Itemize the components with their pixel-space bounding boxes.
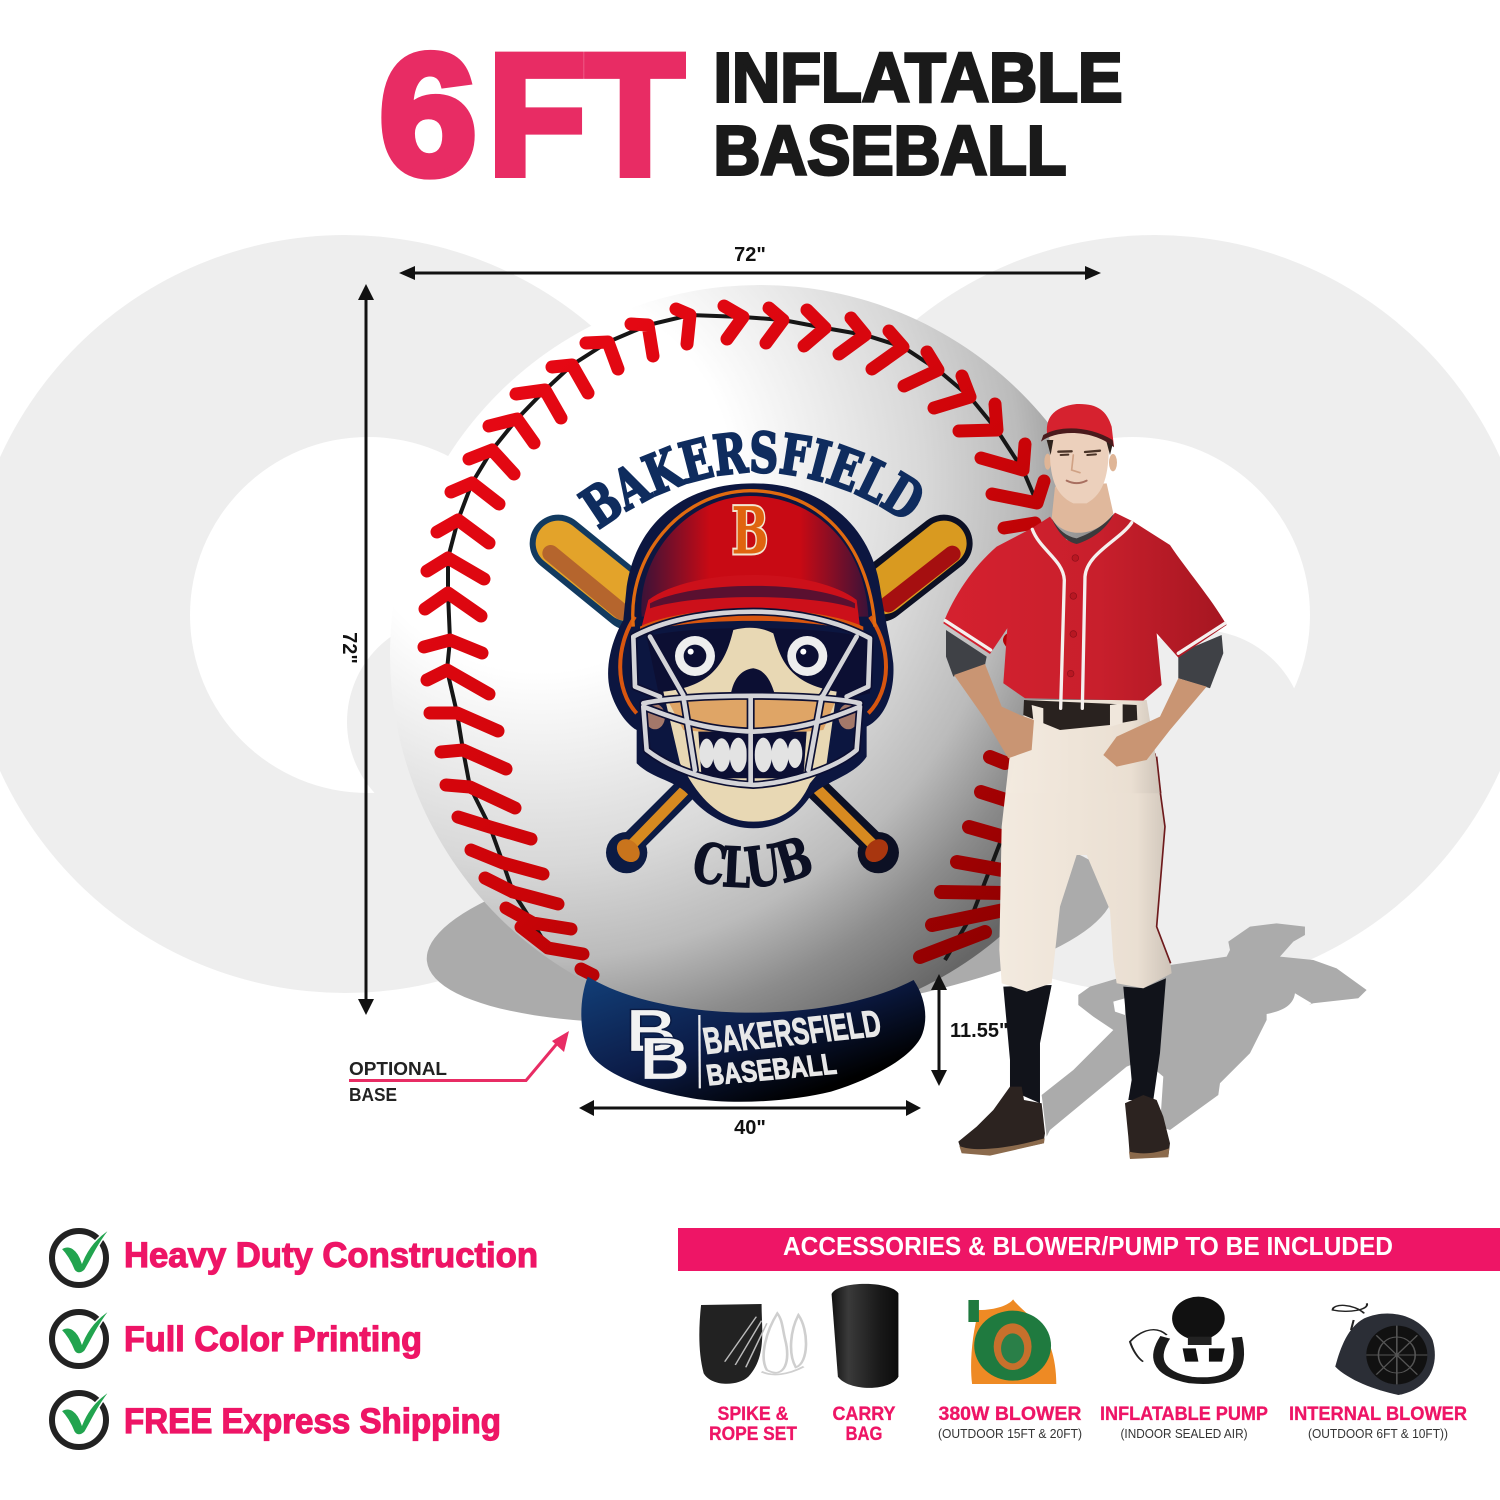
base body	[581, 977, 925, 1102]
pants	[999, 753, 1172, 992]
label: inflatable pump	[1100, 1404, 1268, 1441]
base divider	[697, 1015, 702, 1088]
accessories panel	[678, 1228, 1500, 1445]
eye mask	[647, 628, 870, 700]
label: spike and rope set	[709, 1404, 797, 1445]
undershirt sleeves	[946, 630, 1223, 688]
team logo: CLUB	[694, 838, 812, 888]
player upper body	[943, 404, 1227, 793]
label: inflatable pump: INFLATABLE PUMP	[1100, 1404, 1268, 1425]
base text	[700, 1003, 884, 1092]
accessories banner: ACCESSORIES & BLOWER/PUMP TO BE INCLUDED	[783, 1231, 1393, 1261]
base monogram: B	[626, 997, 677, 1065]
label: 380W blower: (OUTDOOR 15FT & 20FT)	[938, 1427, 1082, 1441]
belt	[1023, 700, 1137, 730]
label: carry bag: BAG	[846, 1424, 882, 1445]
undershirt collar	[1052, 513, 1114, 544]
label: 380W blower: 380W BLOWER	[938, 1404, 1082, 1425]
player	[943, 404, 1227, 1159]
dimension: base width 40	[579, 1100, 921, 1139]
jersey piping	[945, 523, 1225, 708]
ground shadow: ball	[417, 797, 1123, 1053]
skull	[663, 628, 837, 822]
pants top	[1008, 700, 1162, 793]
seam line	[447, 315, 1037, 960]
eyes	[675, 636, 827, 676]
hair	[1047, 440, 1113, 455]
title: 6FT: 6	[379, 19, 477, 211]
logo text: BAKERSFIELD	[598, 472, 911, 530]
title	[379, 19, 1122, 211]
dimension: height 72: 72"	[338, 632, 360, 664]
ball sphere	[390, 285, 1130, 1025]
face mask	[633, 612, 870, 785]
head silhouette	[608, 483, 894, 828]
forearms	[954, 664, 1207, 767]
feature text 2: Full Color Printing	[124, 1320, 422, 1359]
shoes	[958, 1087, 1170, 1158]
dimension: base height	[931, 974, 1008, 1086]
ears	[1044, 454, 1117, 471]
callout: optional base	[349, 1031, 569, 1105]
base text: BASEBALL	[704, 1048, 839, 1092]
title: 6FT: FT	[488, 19, 684, 211]
title: inflatable baseball: BASEBALL	[714, 112, 1066, 190]
feature text 1: Heavy Duty Construction	[124, 1236, 538, 1275]
jersey buttons	[1067, 555, 1079, 677]
check icon 3	[52, 1390, 111, 1447]
check icon 1	[52, 1228, 111, 1285]
callout: optional base: OPTIONAL	[349, 1058, 447, 1079]
mouth	[698, 732, 807, 778]
neck	[1052, 483, 1113, 533]
label: inflatable pump: (INDOOR SEALED AIR)	[1120, 1427, 1248, 1441]
icon: 380W blower	[968, 1299, 1056, 1384]
label: carry bag: CARRY	[832, 1404, 896, 1425]
skull ears	[645, 704, 858, 729]
label: carry bag	[832, 1404, 896, 1445]
dimension: height 72	[338, 284, 374, 1015]
label: spike and rope set: SPIKE &	[718, 1404, 789, 1425]
logo text: CLUB	[690, 872, 818, 887]
cheeks	[667, 695, 837, 732]
label: internal blower	[1289, 1404, 1467, 1441]
inflatable base	[581, 977, 925, 1102]
label: internal blower: (OUTDOOR 6FT & 10FT))	[1308, 1427, 1448, 1441]
callout: optional base: BASE	[349, 1084, 397, 1105]
socks	[1003, 978, 1166, 1103]
feature list	[52, 1228, 538, 1447]
facial features	[1058, 451, 1100, 483]
title: 6FT	[379, 19, 684, 211]
face	[1048, 427, 1112, 503]
stitches	[424, 306, 1044, 975]
accessory icons	[699, 1284, 1435, 1395]
dimension: base width 40: 40"	[734, 1117, 766, 1139]
team logo	[530, 430, 973, 888]
icon: spike and rope set	[699, 1304, 806, 1384]
cap brim	[1041, 428, 1114, 447]
ground shadow: player	[1042, 923, 1367, 1137]
accessories banner	[678, 1228, 1500, 1271]
dimension: base height: 11.55"	[950, 1020, 1008, 1042]
baseball	[390, 285, 1130, 1025]
cap	[1047, 404, 1114, 447]
player legs	[958, 753, 1172, 1159]
icon: carry bag	[832, 1284, 898, 1388]
check icon 2	[52, 1309, 111, 1366]
label: 380W blower	[938, 1404, 1082, 1441]
helmet letter: B	[732, 493, 768, 569]
label: internal blower: INTERNAL BLOWER	[1289, 1404, 1467, 1425]
icon: inflatable pump	[1130, 1297, 1239, 1381]
teeth	[699, 738, 802, 772]
bats	[551, 543, 952, 873]
title: inflatable baseball: INFLATABLE	[714, 38, 1122, 116]
base text: BAKERSFIELD	[700, 1003, 884, 1062]
background rings	[0, 235, 1500, 993]
nose	[731, 668, 775, 695]
icon: internal blower	[1333, 1303, 1435, 1395]
base monogram	[626, 997, 690, 1093]
dimension: width 72: 72"	[734, 244, 766, 266]
helmet	[633, 491, 875, 633]
base monogram: B	[639, 1024, 690, 1093]
jersey	[943, 513, 1227, 701]
feature text 3: FREE Express Shipping	[124, 1402, 501, 1441]
team logo: BAKERSFIELD	[576, 430, 922, 530]
title: inflatable baseball	[714, 38, 1122, 190]
ear flaps	[620, 617, 886, 713]
label: spike and rope set: ROPE SET	[709, 1424, 797, 1445]
dimension: width 72	[399, 244, 1101, 280]
